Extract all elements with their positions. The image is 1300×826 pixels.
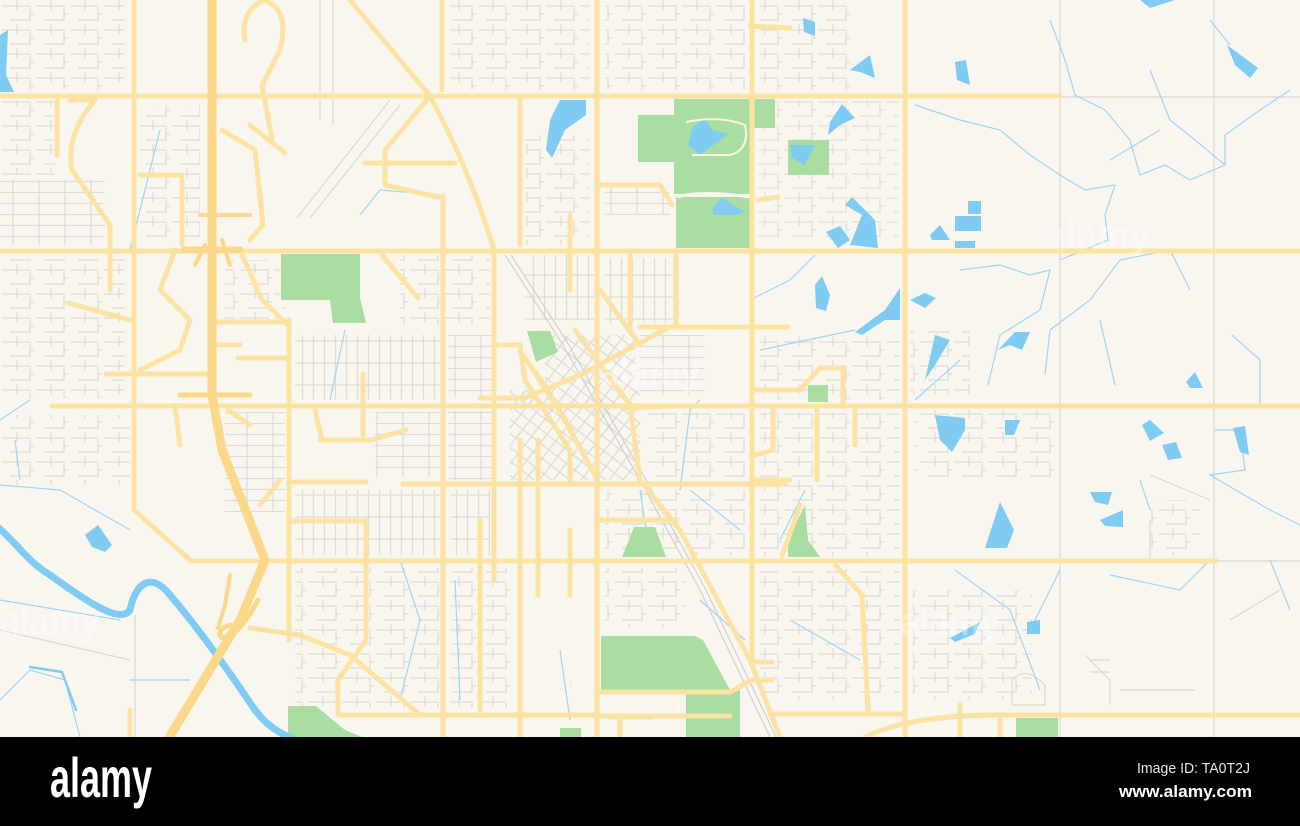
park path (677, 194, 750, 197)
freeway and interchanges (170, 0, 265, 736)
photo watermarks: alamy (1045, 213, 1151, 257)
photo watermarks: alamy (900, 600, 1001, 644)
image id: Image ID: TA0T2J (1137, 760, 1250, 777)
residential street grids (0, 0, 1200, 708)
photo watermarks: alamy (600, 350, 701, 394)
photo watermarks: alamy (0, 600, 101, 644)
parks (281, 99, 1058, 737)
alamy logo: alamy (50, 746, 152, 809)
website: www.alamy.com (1118, 782, 1252, 801)
park pond ring (686, 119, 746, 155)
river (0, 525, 295, 740)
water bodies (0, 0, 1258, 642)
vertical arterials (57, 0, 1000, 737)
photo watermarks (0, 213, 1151, 644)
diagonal arterials (68, 0, 800, 737)
footer bar (0, 737, 1300, 826)
